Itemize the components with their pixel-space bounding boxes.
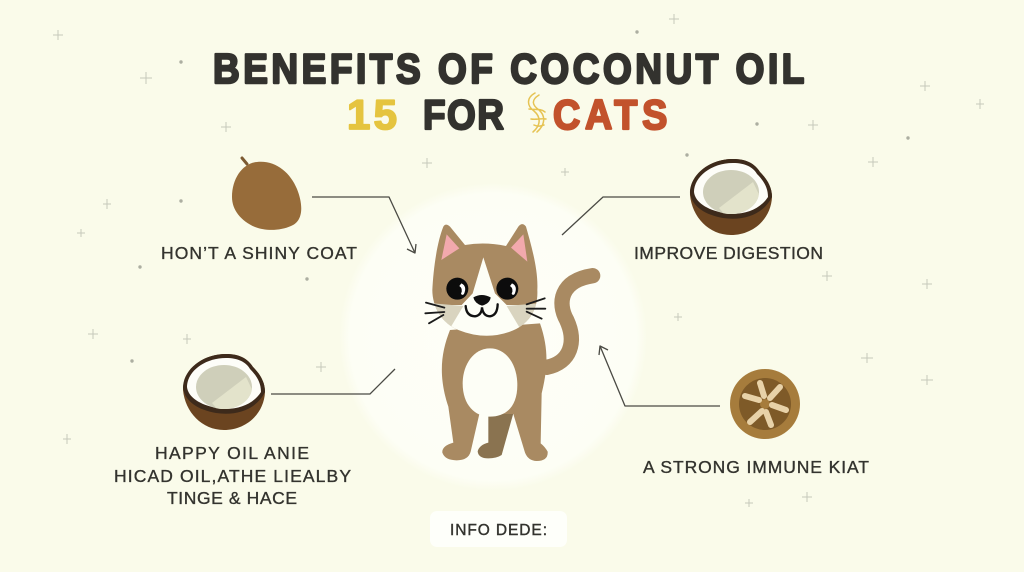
label: happy oil, three lines: TINGE & HACE [167, 488, 297, 508]
cat whiskers [425, 298, 545, 323]
connector: top right [562, 197, 680, 235]
info box label: INFO DEDE: [450, 522, 547, 539]
background sparkles [53, 14, 984, 507]
cat body [442, 323, 548, 461]
central glow circle [339, 183, 647, 491]
label: happy oil, three lines [114, 443, 351, 508]
title squiggle [528, 93, 546, 132]
connector: bottom left [271, 369, 395, 394]
label: happy oil, three lines: HICAD OIL,ATHE LIEALBY [114, 466, 351, 486]
icon: coconut half right [690, 159, 772, 235]
cat tail [547, 276, 593, 367]
title line 1: BENEFITS OF COCONUT OIL [213, 46, 804, 93]
cat head [425, 224, 545, 340]
cat illustration [425, 224, 593, 461]
info box [430, 511, 567, 547]
label: happy oil, three lines: HAPPY OIL ANIE [155, 443, 309, 463]
icon: coconut shell cross-section [730, 369, 800, 439]
label: shiny coat: HON’T A SHINY COAT [161, 243, 357, 263]
cat nose [473, 295, 491, 306]
icon: coconut half left [183, 354, 265, 430]
cat back leg [478, 413, 513, 458]
connector: bottom right arrow [599, 346, 720, 406]
cat belly [463, 348, 517, 417]
cat ears inner [441, 234, 459, 260]
cat mouth [466, 304, 498, 316]
cat eyes [446, 278, 518, 300]
connector: top left arrow [312, 197, 416, 253]
title word for: FOR [423, 92, 504, 139]
icon: whole coconut [232, 158, 301, 230]
title number 15: 15 [347, 91, 397, 138]
label: improve digestion: IMPROVE DIGESTION [634, 243, 823, 263]
label: strong immune: A STRONG IMMUNE KIAT [643, 457, 869, 477]
title [213, 46, 804, 139]
title word cats: CATS [553, 92, 667, 138]
